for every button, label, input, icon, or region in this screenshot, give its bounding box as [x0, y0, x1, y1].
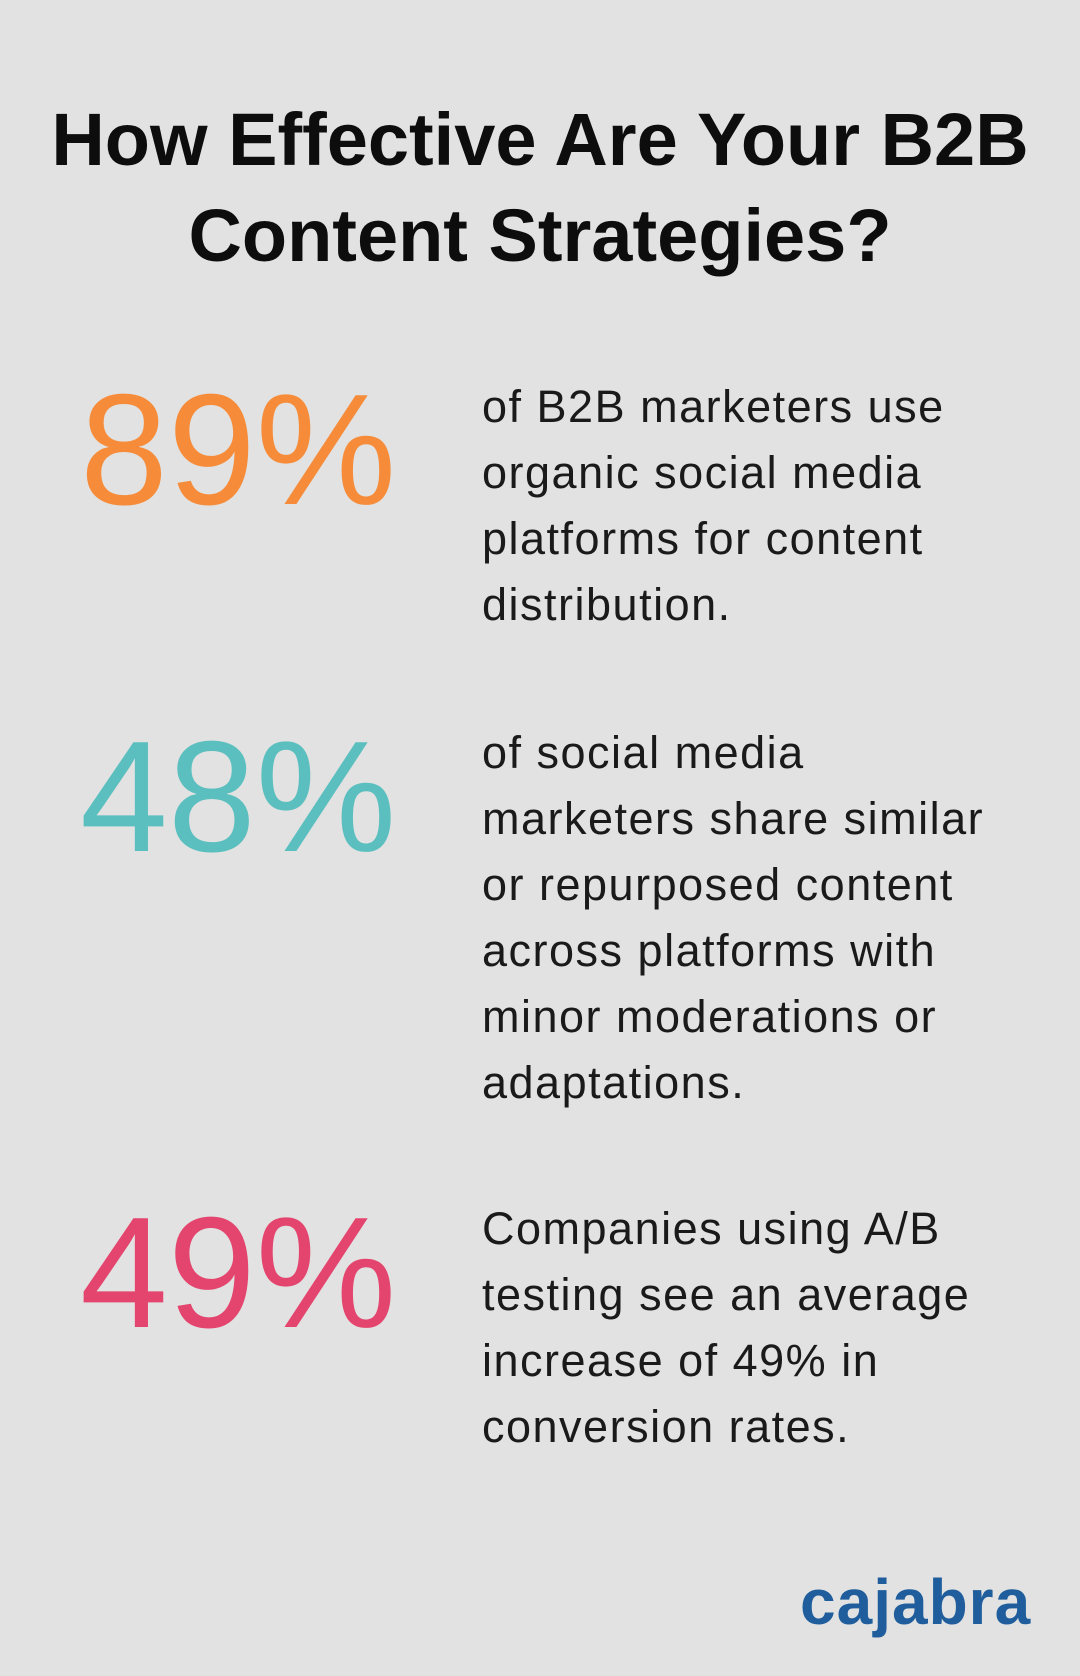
stat 3 text: conversion rates.	[482, 1401, 850, 1452]
stat 2 text: or repurposed content	[482, 859, 954, 910]
stat 2 text: of social media	[482, 727, 805, 778]
stat 1 text: distribution.	[482, 579, 732, 630]
logo: cajabra	[800, 1566, 1031, 1638]
stat 1 text: of B2B marketers use	[482, 381, 945, 432]
stat 2 text	[482, 727, 984, 1108]
stat 2 text: across platforms with	[482, 925, 936, 976]
stat 3 number: 49%	[80, 1185, 396, 1361]
stat 3 text: increase of 49% in	[482, 1335, 879, 1386]
stat 3 text: Companies using A/B	[482, 1203, 941, 1254]
stat 1 text	[482, 381, 945, 630]
stat 2 text: marketers share similar	[482, 793, 984, 844]
stat 2 number: 48%	[80, 709, 396, 885]
stat 3 text: testing see an average	[482, 1269, 970, 1320]
stat 1 number: 89%	[80, 362, 396, 538]
stat 3 text	[482, 1203, 970, 1452]
stat 1 text: organic social media	[482, 447, 922, 498]
title: How Effective Are Your B2B	[51, 98, 1029, 181]
stat 1 text: platforms for content	[482, 513, 924, 564]
stat 2 text: minor moderations or	[482, 991, 937, 1042]
stat 2 text: adaptations.	[482, 1057, 745, 1108]
title	[51, 98, 1029, 277]
title: Content Strategies?	[188, 194, 892, 277]
